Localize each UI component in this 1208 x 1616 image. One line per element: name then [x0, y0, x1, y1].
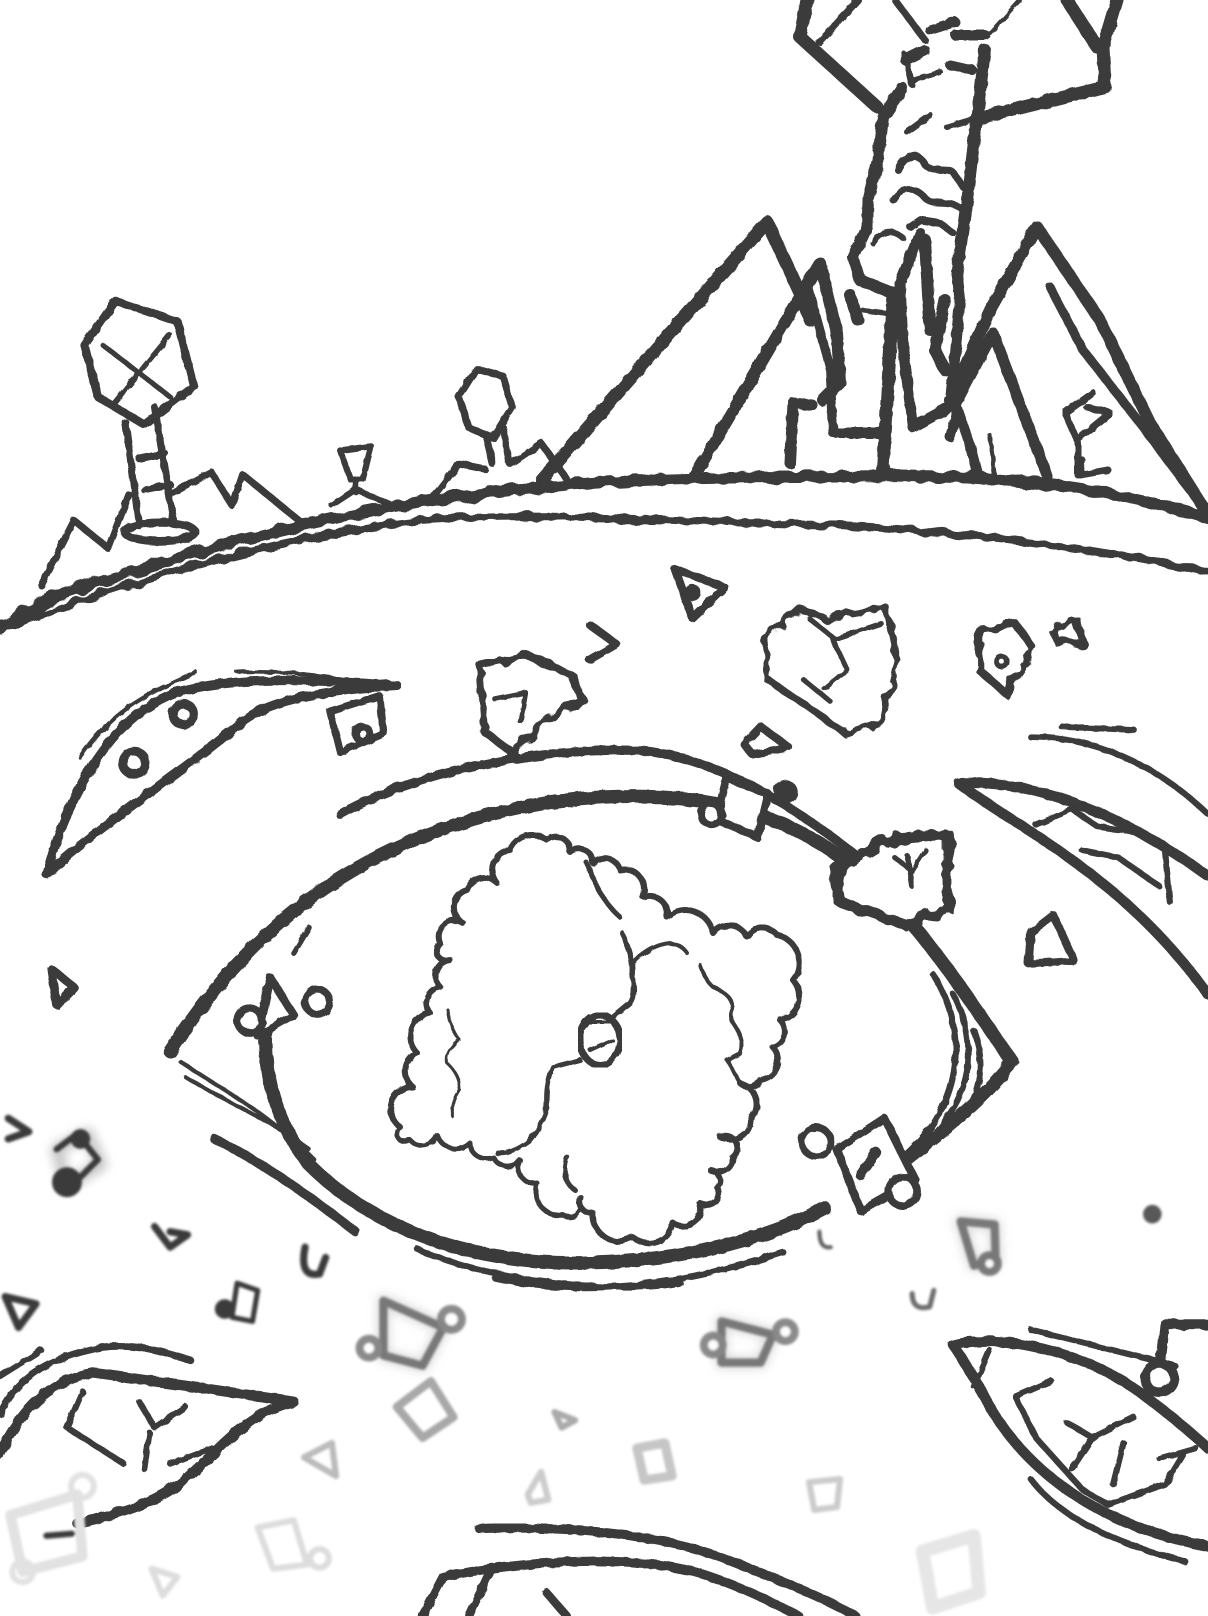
phage: small centre-left: [332, 446, 392, 505]
phage: medium: [433, 369, 567, 497]
faded capsids: centre group: [360, 1209, 1157, 1438]
cell: right: [959, 727, 1208, 995]
faded capsids: bottom group: [10, 1412, 979, 1608]
cell: bottom left: [0, 1346, 294, 1523]
faded debris: dark lower left: [5, 1118, 326, 1328]
cell surface membrane: [0, 476, 1208, 630]
cell: top left: [46, 672, 397, 874]
nucleoid core: [580, 1015, 620, 1065]
phage: left large: [41, 301, 299, 585]
cell: bottom centre: [423, 1528, 855, 1616]
phage: small right: [1065, 393, 1110, 475]
cell: bottom right: [953, 1324, 1208, 1562]
ribosome inner marks: [495, 618, 1007, 886]
nucleoid: [391, 835, 800, 1243]
blurred halos behind faded capsids: [57, 1134, 996, 1366]
ribosome clusters floating: [479, 608, 1084, 926]
large phage: [542, 0, 1205, 510]
central cell envelope: [170, 750, 1012, 1288]
capsids: floating top set: [52, 569, 1074, 1005]
enzyme complexes on envelope: [237, 696, 917, 1211]
